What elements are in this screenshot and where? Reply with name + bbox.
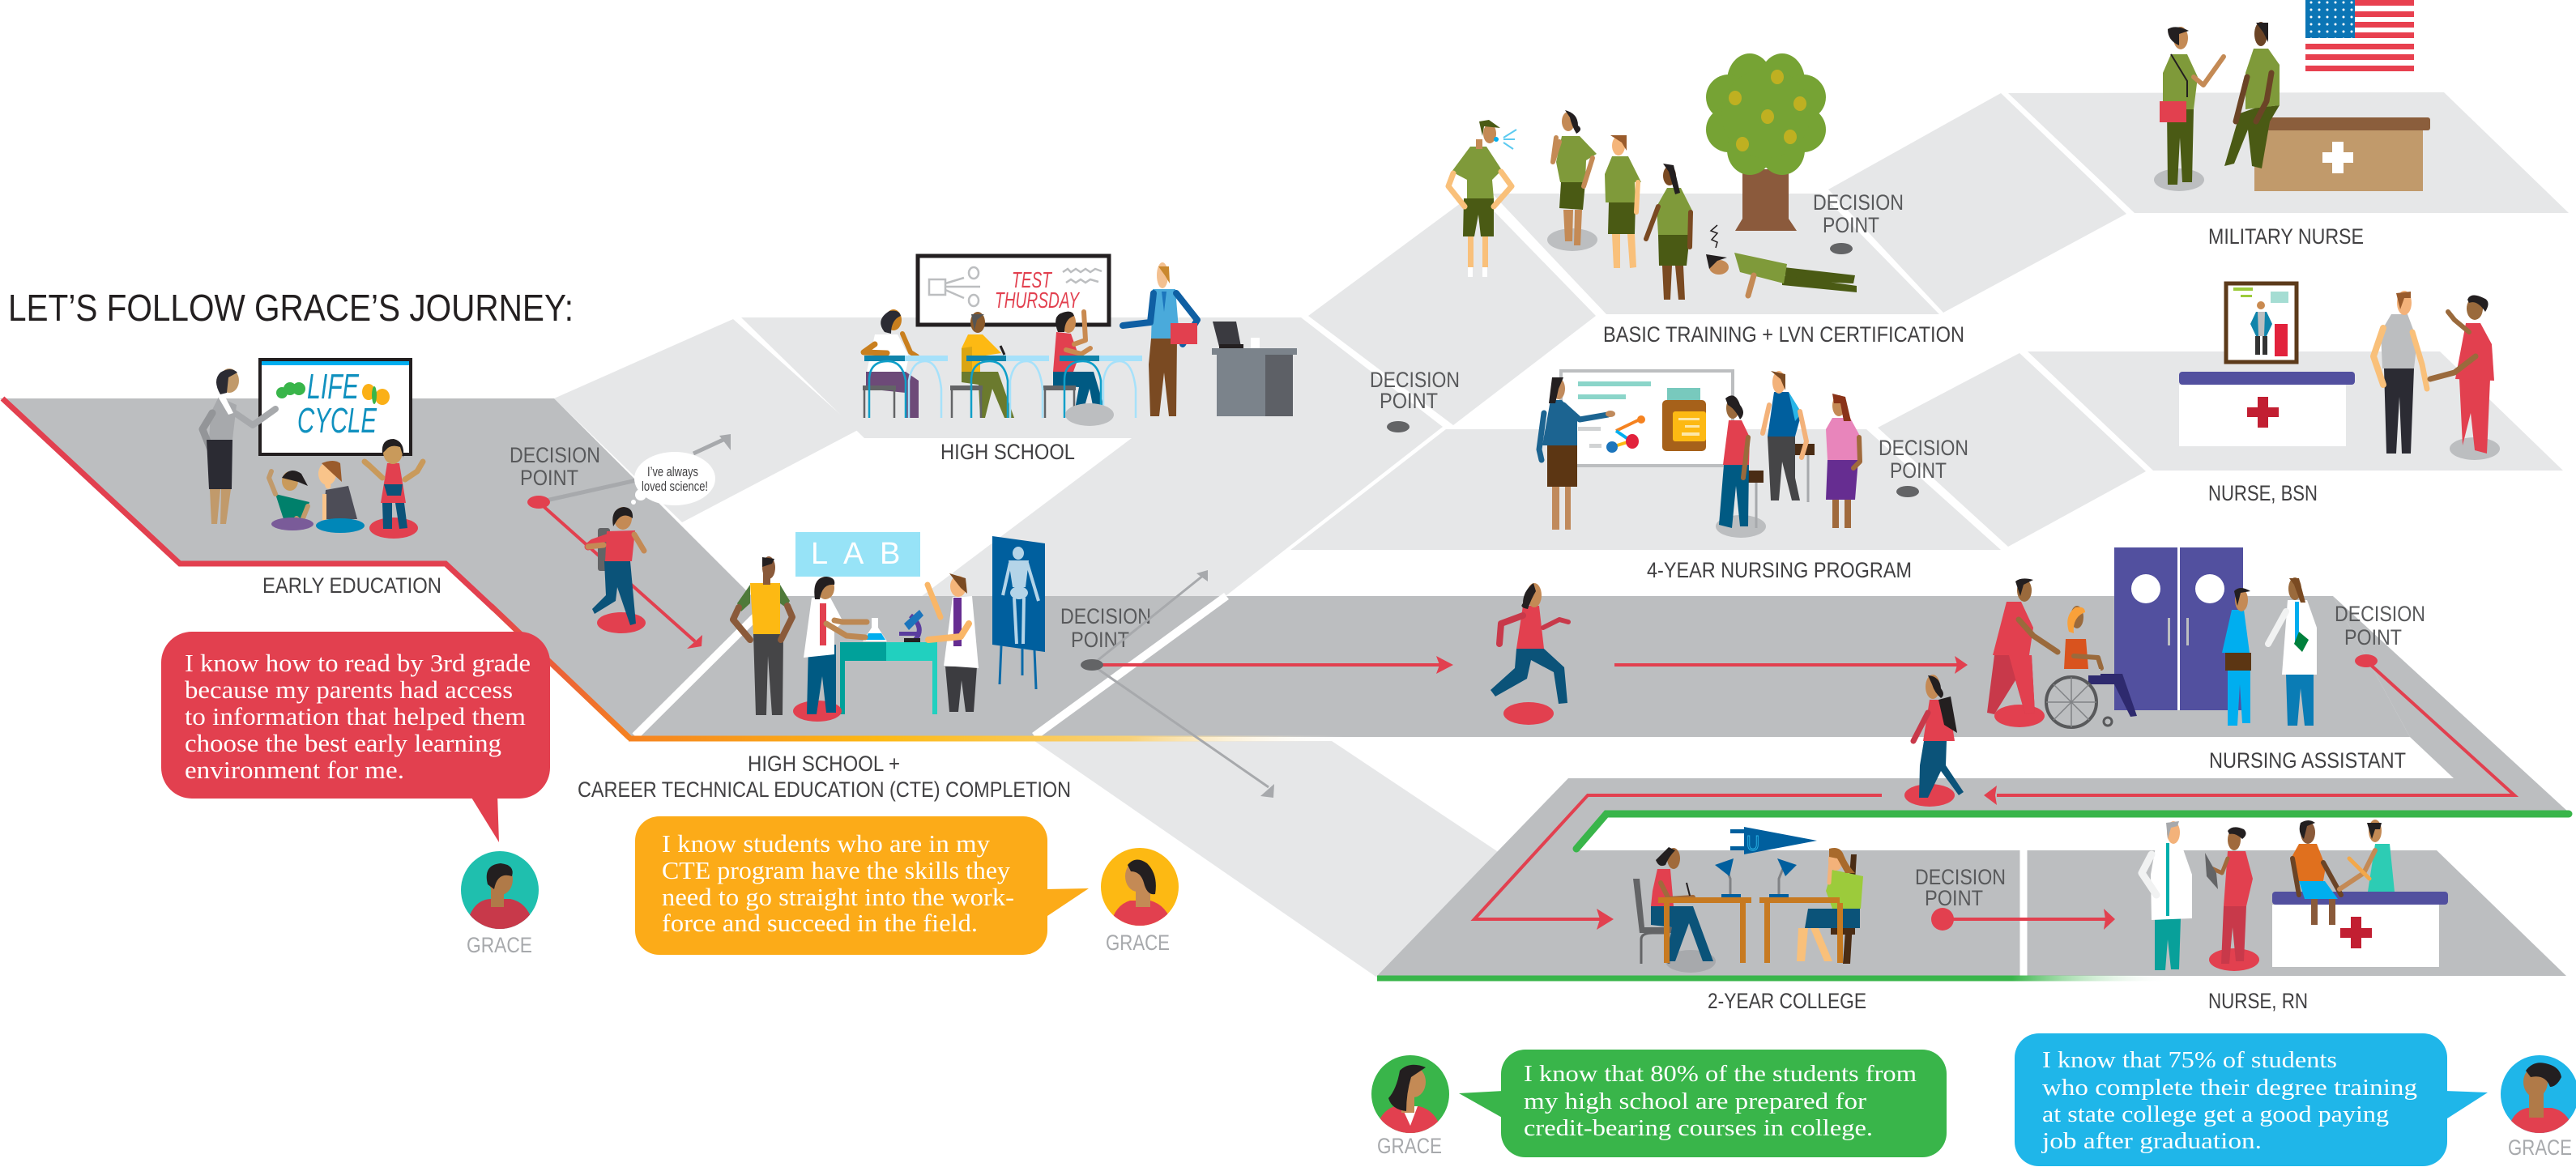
road: white separators — [635, 596, 2024, 976]
figure: student woman pink — [1826, 394, 1861, 528]
decision point: nursing assistant: POINT — [2344, 625, 2402, 650]
figure: student at right — [1797, 848, 1863, 964]
scene: nursing assistant — [1987, 547, 2317, 727]
arrow: red line to nursing assistant — [1614, 656, 1968, 674]
whiteboard: test thursday: TEST — [1012, 267, 1052, 292]
study tables — [1658, 897, 1843, 963]
scene: basic training — [1448, 53, 1857, 300]
callout: red, early learning: because my parents had access — [185, 675, 513, 704]
decision point: college: POINT — [1925, 886, 1983, 910]
callout: red, early learning — [161, 632, 550, 842]
figure: student 1 — [864, 309, 919, 418]
floor marker — [1547, 228, 1597, 251]
figure: push-up trainee — [1706, 225, 1857, 296]
figure: nurse in teal — [2339, 820, 2395, 892]
callout: orange, CTE: need to go straight into the work- — [662, 883, 1014, 911]
sign: LAB: B — [880, 537, 900, 571]
figure: seated soldier — [2224, 22, 2280, 168]
exam table: BSN — [2179, 372, 2355, 446]
exam table: military — [2254, 117, 2430, 191]
callout: red, early learning: to information that helped them — [185, 702, 526, 730]
callout: green, college ready — [1459, 1050, 1947, 1157]
callout: green, college ready: credit-bearing courses in college. — [1524, 1115, 1873, 1141]
decision point 1 with arrows and thought bubble: DECISION — [510, 443, 600, 467]
callout: green, college ready: I know that 80% of the students from — [1524, 1061, 1917, 1087]
decision point: nursing assistant — [1984, 602, 2514, 805]
road: dark main pathway — [0, 398, 2569, 976]
scene: lab — [733, 532, 1045, 722]
callout: green, college ready: my high school are prepared for — [1524, 1088, 1866, 1114]
decision point: basic training: POINT — [1823, 213, 1879, 237]
figure: HS teacher — [1123, 262, 1197, 416]
figure: student in yellow vest — [733, 556, 792, 715]
callout: orange, CTE: I know students who are in my — [662, 829, 991, 858]
figure: lab instructor — [928, 573, 979, 712]
figure: standing girl with base — [365, 439, 423, 539]
floor marker — [2209, 948, 2259, 971]
decision point 1 with arrows and thought bubble: POINT — [520, 466, 578, 490]
decision point: basic training: DECISION — [1813, 190, 1904, 215]
callout: blue, good job: I know that 75% of students — [2042, 1047, 2337, 1073]
figure: seated boy — [316, 461, 365, 533]
avatar: Grace yellow: GRACE — [1106, 931, 1170, 955]
arrow: red line to college — [1474, 795, 1882, 930]
whiteboard: life cycle: CYCLE — [297, 401, 377, 441]
figure: trainee 1 — [1553, 110, 1597, 245]
floor marker — [1065, 403, 1114, 426]
floor marker — [2450, 437, 2500, 460]
figure: nurse pushing — [1987, 578, 2058, 727]
floor marker — [1665, 950, 1716, 973]
road: light lane pieces — [554, 92, 2569, 977]
decision point: lab with arrows: DECISION — [1060, 604, 1151, 628]
label: high school: HIGH SCHOOL — [940, 440, 1075, 464]
decision point: lab with arrows: POINT — [1071, 628, 1129, 652]
decision point: basic training — [1813, 190, 1904, 254]
decision point: college: DECISION — [1915, 865, 2006, 889]
callout: blue, good job: who complete their degree training — [2042, 1075, 2417, 1101]
callout: orange, CTE: force and succeed in the field. — [662, 909, 978, 937]
figure: instructor woman — [1539, 377, 1615, 530]
figure: RN nurse — [2205, 827, 2253, 964]
flag — [2305, 0, 2414, 71]
scene: early education — [203, 360, 423, 539]
label: basic training: BASIC TRAINING + LVN CERTIFICATION — [1603, 322, 1964, 347]
callout: orange, CTE — [635, 816, 1089, 955]
stools — [1743, 444, 1815, 528]
label: military nurse: MILITARY NURSE — [2208, 224, 2364, 249]
figure: teacher — [203, 368, 275, 524]
figure: lab student at table — [793, 577, 867, 722]
decision point 1 with arrows and thought bubble: I’ve always — [647, 464, 698, 479]
label: 2-year college: 2-YEAR COLLEGE — [1708, 989, 1866, 1013]
tree — [1706, 53, 1826, 231]
scene: nurse RN — [2142, 820, 2448, 971]
figure: Grace walking with backpack — [588, 507, 646, 633]
table, flask and microscope — [840, 610, 937, 714]
whiteboard: test thursday — [918, 256, 1109, 325]
figure: seated girl — [269, 471, 313, 530]
teacher desk and laptop — [1212, 322, 1297, 416]
figure: student at left — [1633, 847, 1713, 964]
figure: doctor — [2268, 577, 2317, 726]
callout: blue, good job: at state college get a good paying — [2042, 1101, 2389, 1127]
scene: nurse BSN — [2179, 283, 2500, 460]
label: high school + CTE: CAREER TECHNICAL EDUCATION (CTE) COMPLETION — [578, 777, 1071, 802]
scene: 2-year college — [1633, 827, 1863, 973]
decision point: after high school: DECISION — [1370, 368, 1460, 392]
decision point: college — [1915, 865, 2115, 931]
figure: military nurse — [2160, 27, 2224, 185]
whiteboard: life cycle: LIFE — [307, 367, 359, 407]
sign: LAB: A — [843, 537, 864, 571]
figure: RN doctor — [2142, 821, 2192, 970]
floor marker — [2154, 168, 2204, 191]
avatar: Grace green: GRACE — [1377, 1134, 1442, 1158]
avatar: Grace teal — [461, 851, 539, 957]
figure: trainee 2 — [1605, 135, 1641, 268]
avatar: Grace green — [1371, 1055, 1449, 1158]
title: LET’S FOLLOW GRACE’S JOURNEY: — [8, 287, 574, 329]
scene: 4-year nursing program — [1539, 371, 1861, 538]
lamps — [1715, 858, 1797, 898]
avatar: Grace teal: GRACE — [467, 933, 532, 957]
label: high school + CTE — [578, 752, 1071, 802]
callout: red, early learning: I know how to read by 3rd grade — [185, 649, 531, 677]
figure: student 3 — [1053, 312, 1107, 418]
sign: LAB: L — [811, 537, 828, 571]
label: 4-year nursing: 4-YEAR NURSING PROGRAM — [1647, 558, 1912, 582]
decision point 1 with arrows and thought bubble — [510, 434, 731, 649]
figure: patient in wheelchair — [2046, 606, 2137, 727]
decision point: nursing assistant: DECISION — [2335, 602, 2425, 626]
figure: Grace running — [1491, 583, 1568, 725]
callout: blue, good job: job after graduation. — [2041, 1128, 2262, 1154]
poster: skeleton — [992, 536, 1045, 689]
label: early education: EARLY EDUCATION — [262, 573, 441, 598]
callout: orange, CTE: CTE program have the skills they — [662, 856, 1011, 884]
figure: patient man — [2373, 291, 2427, 454]
decision point: lab with arrows — [1060, 570, 1453, 798]
callout: blue, good job — [2015, 1033, 2488, 1166]
decision point: after high school — [1370, 368, 1460, 432]
label: nurse RN: NURSE, RN — [2208, 989, 2308, 1013]
figure: nurse in red — [2430, 295, 2494, 454]
poster — [2226, 283, 2297, 362]
decision point: 4-year — [1879, 436, 1968, 497]
pennant — [1730, 827, 1817, 855]
figure: seated patient — [2291, 820, 2341, 925]
figure: trainee 3 — [1646, 164, 1693, 300]
presentation board — [1561, 371, 1733, 466]
figure: student man — [1763, 371, 1806, 500]
label: nursing assistant: NURSING ASSISTANT — [2209, 748, 2406, 773]
figure: Grace walking left — [1904, 675, 1964, 807]
decision point: after high school: POINT — [1380, 389, 1438, 413]
whiteboard: test thursday: THURSDAY — [995, 287, 1081, 313]
label: nurse BSN: NURSE, BSN — [2208, 481, 2318, 505]
decision point: 4-year: POINT — [1890, 458, 1947, 483]
avatar: Grace yellow — [1101, 848, 1179, 955]
pennant: U — [1746, 831, 1759, 855]
decision point: 4-year: DECISION — [1879, 436, 1968, 460]
floor marker — [1716, 515, 1766, 538]
figure: sergeant — [1448, 120, 1516, 277]
avatar: Grace blue — [2501, 1055, 2576, 1160]
figure: student girl — [1719, 395, 1750, 528]
scene: military nurse — [2154, 0, 2430, 191]
callout: red, early learning: choose the best early learning — [185, 729, 501, 757]
label: high school + CTE: HIGH SCHOOL + — [748, 752, 900, 776]
figure: student 2 — [962, 312, 1014, 418]
whiteboard: life cycle — [260, 360, 411, 454]
exam table: RN — [2272, 892, 2448, 967]
sign: LAB — [795, 532, 920, 577]
double doors — [2114, 547, 2243, 710]
scene: high school — [863, 256, 1297, 426]
decision point 1 with arrows and thought bubble: loved science! — [642, 479, 708, 494]
figure: nurse in blue — [2222, 588, 2251, 726]
road: coloured outlines — [2, 398, 2569, 978]
callout: red, early learning: environment for me. — [185, 756, 404, 784]
desks and stools — [863, 356, 1142, 418]
